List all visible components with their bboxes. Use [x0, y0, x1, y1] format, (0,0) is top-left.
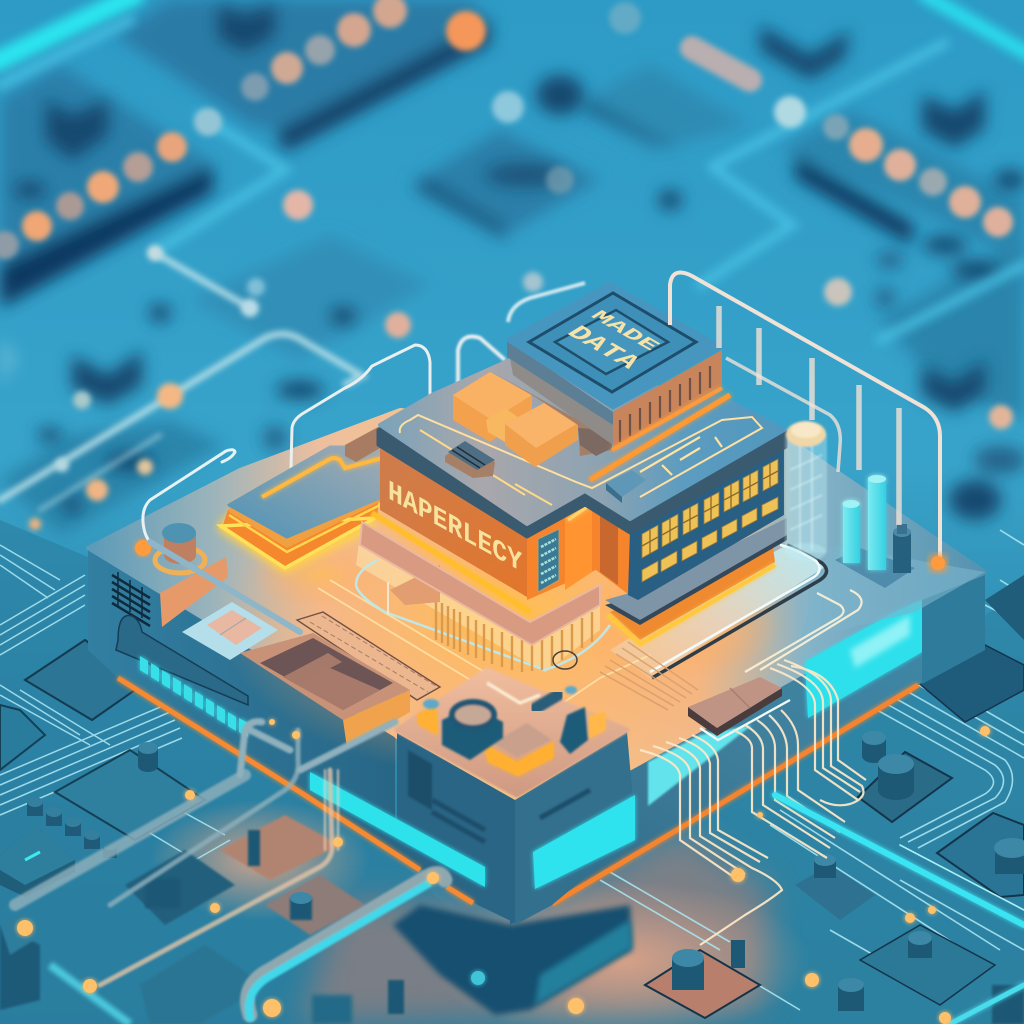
glowing entrance light [568, 505, 590, 520]
upper block [507, 283, 722, 450]
amber front face [343, 690, 410, 748]
front cyan window [533, 795, 635, 889]
white wire loop left [143, 450, 235, 542]
right amber cap [590, 712, 605, 738]
open pit box [240, 633, 410, 748]
platform left wall [88, 545, 478, 905]
blurred far circuit chips [0, 0, 1024, 535]
white wire left centre [291, 345, 430, 468]
wire arc to roof [458, 336, 505, 392]
dark chip pads right and bottom [125, 575, 1024, 1024]
dark chip pads left [0, 640, 205, 1010]
foreground lower board shading [0, 520, 1024, 1024]
white frame wire right [670, 273, 940, 558]
far orange and white bokeh dots [0, 0, 1013, 530]
lower building body [378, 360, 786, 600]
far pale wires [0, 253, 362, 510]
gold hot spot left of base [250, 540, 390, 610]
building sign text: HAPERLECY [388, 476, 522, 581]
block left wall [397, 733, 515, 923]
right wing blue wall [628, 445, 784, 600]
slab blue top [229, 447, 382, 537]
tan pedestal near cylinder [135, 523, 228, 627]
dark cylinder bar [893, 524, 911, 573]
block right wall [515, 732, 636, 925]
platform blue tint right [800, 545, 985, 640]
platform top surface [88, 410, 985, 835]
bright cyan conduit right [775, 795, 1024, 1024]
tan box behind slab [345, 426, 380, 462]
front machine block [397, 670, 636, 925]
amber windows lower row [642, 497, 778, 582]
roof small tab [606, 470, 646, 497]
directory sign [538, 529, 559, 592]
glass hologram base under building [356, 535, 610, 672]
sign glyph lines [541, 539, 556, 583]
warm glow on platform [220, 460, 800, 780]
fan module [442, 706, 503, 760]
fan ring [452, 702, 494, 728]
pit rim [240, 633, 410, 720]
keyboard strip [297, 612, 440, 700]
roof label text [559, 308, 664, 374]
circuit traces left [0, 545, 230, 860]
vents [432, 790, 590, 842]
bright cyan streaks at top corners [0, 0, 1024, 62]
wall behind cubes [492, 372, 612, 456]
blurred far cube components [14, 5, 1024, 520]
orange node [931, 556, 945, 570]
neon trace on slab [262, 458, 382, 497]
grey pipes front left [15, 722, 395, 985]
cyan LED strip left [140, 656, 248, 737]
floating lower slab under building [360, 513, 787, 645]
gold hot spot right of base [560, 570, 780, 680]
cyan window right wall [805, 600, 922, 718]
glass cylinder tower [786, 421, 826, 561]
orange underglow under front block [300, 792, 473, 903]
pit floor [297, 667, 380, 710]
thick grey pipe [150, 542, 300, 632]
cyan conduit pipe front [248, 873, 445, 1018]
orange cube modules [453, 372, 612, 467]
small cylinders on board [27, 731, 1024, 1024]
far soft board traces [0, 20, 1024, 340]
short cyan bar [842, 500, 860, 563]
orange underglow left [118, 678, 300, 792]
left wall vent [112, 572, 150, 626]
glass base outline right [610, 545, 827, 678]
side panel [408, 750, 432, 810]
bus wires right [640, 660, 866, 945]
left wing orange wall [380, 440, 527, 597]
cyan light band front left [310, 772, 485, 887]
pale traces right of glass base [745, 590, 862, 672]
front amber cap [484, 742, 553, 776]
cyan conduit far left [50, 965, 130, 1024]
wire arc back [508, 283, 585, 322]
side module [560, 707, 588, 754]
orange ring connector [155, 547, 205, 573]
neon outer ring [218, 495, 372, 572]
platform chip [688, 677, 790, 740]
white trace on block [487, 683, 540, 703]
pit step [283, 653, 342, 685]
pill module [536, 695, 558, 708]
cyan window lower right wall [648, 725, 752, 806]
block raised plate [493, 723, 552, 757]
amber windows upper row [642, 459, 778, 558]
cyan bar chart [835, 475, 915, 588]
platform right wall [510, 575, 985, 925]
roof glowing traces [400, 415, 762, 497]
right wall end block [922, 575, 985, 684]
roof label line one: MADE [585, 308, 664, 354]
block top [397, 670, 627, 795]
orange tan trace bundle [600, 642, 698, 710]
small left slab with glow [218, 426, 382, 572]
roof label line two: DATA [559, 322, 647, 374]
blue caps [423, 686, 577, 709]
circuit traces right [600, 530, 1024, 1010]
orange underglow right [552, 685, 918, 904]
window mullions [642, 463, 778, 554]
chart base pad [835, 548, 915, 588]
left amber cap [418, 706, 438, 735]
recessed entrance [527, 498, 632, 600]
left wall recess panel [116, 616, 248, 705]
tall cyan bar [868, 475, 886, 570]
roof with notch [378, 360, 786, 537]
small amber nodes [17, 719, 990, 1024]
roof hatch [445, 442, 495, 478]
small screen panel [182, 602, 278, 660]
platform circuit outlines [318, 580, 650, 728]
pit inner walls [260, 638, 393, 710]
right floating slab layers [610, 540, 775, 640]
cyan window highlight [850, 615, 910, 668]
platform base [88, 410, 985, 925]
